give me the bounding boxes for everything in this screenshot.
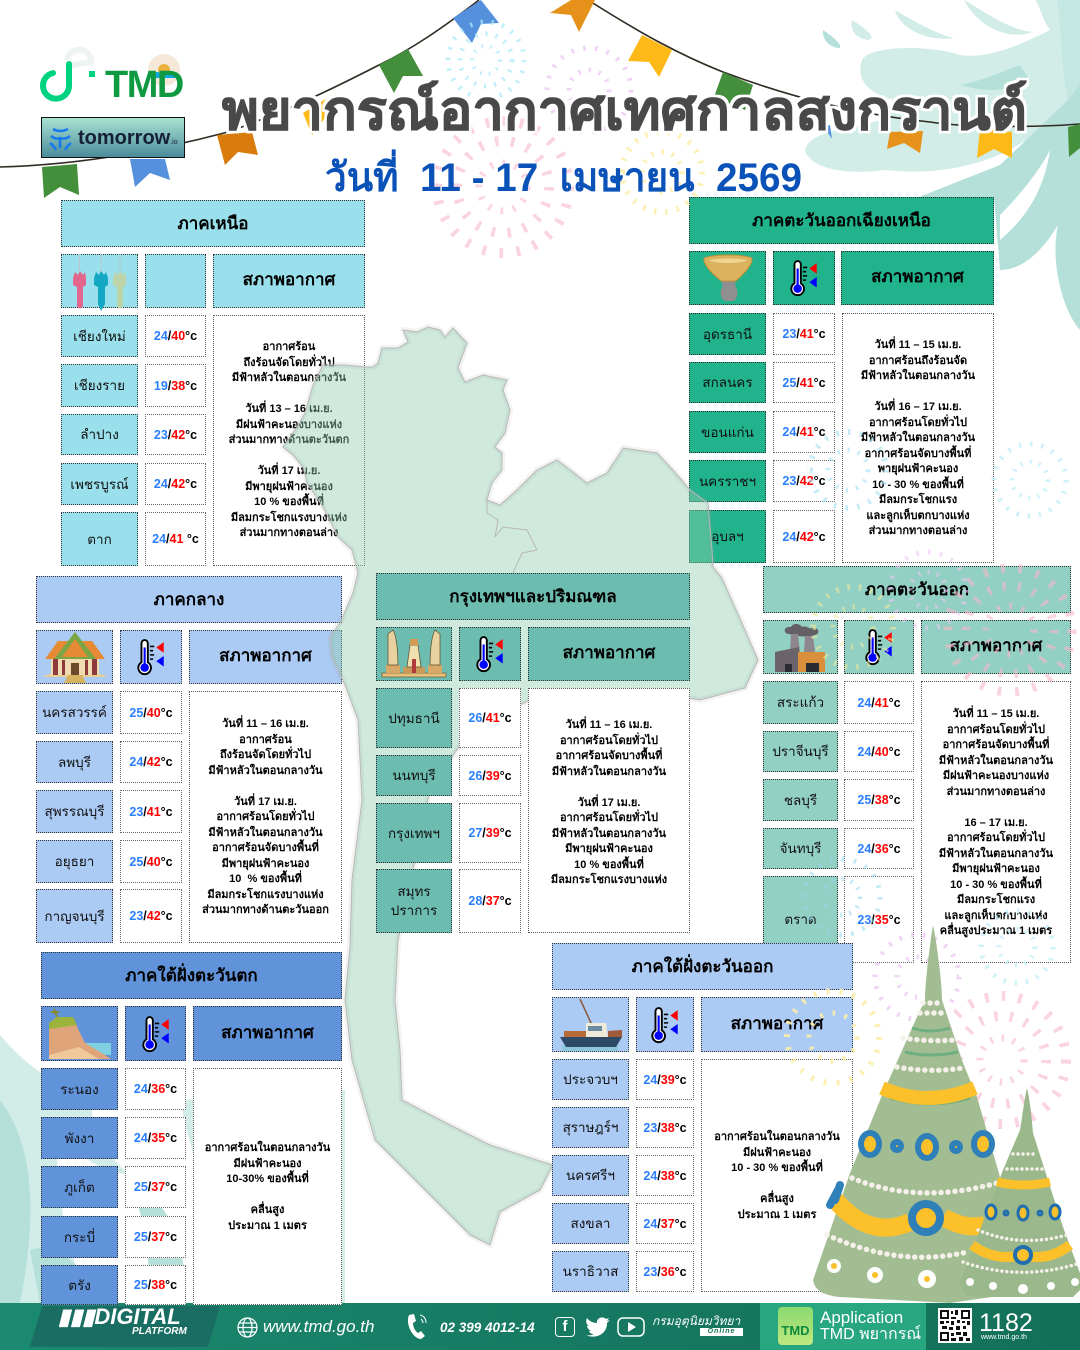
temp: Phetchabun: 24/42°c — [154, 477, 197, 491]
temp: Narathiwat: 23/36°c — [643, 1264, 687, 1278]
temp: Suphan Buri: 23/41°c — [129, 804, 173, 818]
forecast text: Bangkok: อากาศร้อนโดยทั่วไป — [560, 734, 658, 746]
city: Pathum Thani — [376, 688, 452, 748]
forecast text: east: มีฟ้าหลัวในตอนกลางวัน — [939, 848, 1053, 860]
platform word: PLATFORM — [132, 1326, 187, 1337]
forecast text: east: มีพายุฝนฟ้าคะนอง — [952, 863, 1040, 875]
temp: Phang Nga: 24/35°c — [134, 1131, 177, 1145]
heading: south west — [41, 952, 342, 999]
city: Krabi — [41, 1216, 118, 1258]
forecast text: north: ส่วนมากทางด้านตะวันตก — [229, 434, 349, 446]
city: Narathiwat — [552, 1251, 629, 1292]
forecast text: Bangkok: อากาศร้อนจัดบางพื้นที่ — [556, 750, 662, 762]
city: Lopburi — [36, 741, 113, 783]
city: Trang: ตรัง — [68, 1278, 91, 1292]
logo: digital mark — [40, 46, 95, 102]
online tag — [700, 1328, 743, 1336]
city: Tak — [61, 512, 138, 566]
city: Surat Thani — [552, 1107, 629, 1148]
temp: Khon Kaen — [773, 411, 835, 453]
city: Ranong: ระนอง — [60, 1082, 99, 1096]
city: Khon Kaen — [689, 411, 766, 453]
QR code — [938, 1308, 972, 1343]
city: Nakhon Si: นครศรีฯ — [566, 1168, 615, 1183]
temp: Chonburi — [844, 779, 914, 821]
temp: Nakhon Si: 24/38°c — [643, 1168, 687, 1182]
city: Udon Thani: อุดรธานี — [703, 326, 752, 342]
temp: Chanthaburi: 24/36°c — [857, 842, 901, 856]
city: Nonthaburi: นนทบุรี — [392, 768, 436, 783]
temp: Lampang: 23/42°c — [154, 428, 197, 442]
city: Ubon: อุบลฯ — [711, 529, 744, 544]
temp: Chanthaburi — [844, 828, 914, 869]
forecast text: Bangkok — [528, 688, 690, 933]
logo letters: TMD — [105, 64, 183, 106]
panel: east region — [763, 566, 1071, 963]
forecast text: south west: อากาศร้อนในตอนกลางวัน — [205, 1142, 330, 1154]
forecast text: northeast: วันที่ 16 – 17 เม.ย. — [874, 401, 962, 413]
heading: south west: ภาคใต้ฝั่งตะวันตก — [125, 966, 258, 985]
logo sun — [148, 54, 180, 86]
icon: thermometer — [773, 251, 835, 305]
forecast text: east: และลูกเห็บตกบางแห่ง — [944, 910, 1048, 922]
temp: Ayutthaya: 25/40°c — [129, 854, 173, 868]
city: Nakhon Si — [552, 1155, 629, 1196]
forecast text: northeast: ส่วนมากทางตอนล่าง — [869, 525, 967, 537]
forecast text: south west — [193, 1068, 342, 1305]
temp: Kanchanaburi — [120, 889, 182, 943]
city: Bangkok — [376, 803, 452, 863]
temp: Phetchabun — [145, 463, 206, 505]
icon: globe — [237, 1317, 258, 1338]
icon: facebook — [555, 1317, 575, 1337]
forecast text: north — [213, 315, 365, 566]
city: Ayutthaya: อยุธยา — [55, 854, 94, 869]
forecast text: central: อากาศร้อนโดยทั่วไป — [216, 811, 315, 823]
temp: Sakon Nakhon: 25/41°c — [782, 376, 826, 390]
city: Nakhon Sawan: นครสวรรค์ — [42, 705, 107, 720]
forecast text: east: ส่วนมากทางตอนล่าง — [947, 786, 1045, 798]
forecast text: east: อากาศร้อนจัดบางพื้นที่ — [943, 739, 1049, 751]
city: Chiang Mai: เชียงใหม่ — [73, 328, 126, 344]
temp: Tak: 24/41 °c — [152, 532, 199, 546]
heading: south east: ภาคใต้ฝั่งตะวันออก — [632, 957, 773, 976]
temp: Ubon — [773, 510, 835, 563]
forecast text: east: มีฝนฟ้าคะนองบางแห่ง — [943, 770, 1049, 782]
temp: Surat Thani — [636, 1107, 694, 1148]
temp: Pathum Thani — [459, 688, 521, 748]
city: Narathiwat: นราธิวาส — [563, 1264, 618, 1279]
heading: Bangkok — [376, 573, 690, 620]
city: Samut Prakan: ปราการ — [391, 903, 437, 918]
city: Suphan Buri — [36, 790, 113, 833]
city: Khon Kaen: ขอนแก่น — [701, 424, 754, 440]
forecast text: north: ส่วนมากทางตอนล่าง — [240, 527, 338, 539]
forecast text: south east: คลื่นสูง — [760, 1193, 794, 1205]
city: Sa Kaeo — [763, 681, 838, 724]
city: Sakon Nakhon: สกลนคร — [702, 375, 753, 390]
forecast text: south east — [701, 1059, 853, 1292]
forecast text: Bangkok: มีพายุฝนฟ้าคะนอง — [565, 843, 653, 855]
icon: thermometer — [636, 997, 694, 1052]
heading: weather: สภาพอากาศ — [221, 1022, 314, 1042]
icon: TMD app — [778, 1307, 813, 1345]
city: Ranong — [41, 1068, 118, 1110]
forecast text: north: มีลมกระโชกแรงบางแห่ง — [231, 512, 347, 524]
heading: northeast — [689, 197, 994, 244]
forecast text: east: 16 – 17 เม.ย. — [964, 816, 1028, 828]
panel: north region — [61, 200, 365, 566]
heading: weather: สภาพอากาศ — [243, 270, 335, 289]
temp: Trang: 25/38°c — [134, 1278, 177, 1292]
forecast text: northeast — [842, 313, 994, 563]
city: Phang Nga: พังงา — [65, 1130, 94, 1146]
temp: Prachinburi — [844, 731, 914, 772]
city: Chonburi: ชลบุรี — [784, 792, 817, 808]
temp: Chiang Rai — [145, 364, 206, 407]
temp: Lopburi — [120, 741, 182, 783]
icon: phone — [408, 1314, 426, 1339]
city: Ayutthaya — [36, 840, 113, 883]
icon: thermometer — [125, 1006, 186, 1061]
logo: tomorrow.io — [41, 117, 185, 158]
temp: Phang Nga — [125, 1117, 186, 1159]
temp: Samut Prakan — [459, 869, 521, 933]
forecast text: Bangkok: มีลมกระโชกแรงบางแห่ง — [551, 874, 667, 886]
temp: Bangkok — [459, 803, 521, 863]
temp: Trat — [844, 876, 914, 963]
logo: TMD — [105, 54, 183, 106]
forecast text: northeast: อากาศร้อนโดยทั่วไป — [869, 416, 967, 428]
forecast text: central — [189, 691, 342, 943]
forecast text: central: ถึงร้อนจัดโดยทั่วไป — [220, 749, 311, 761]
heading: central — [36, 576, 342, 623]
heading: weather: สภาพอากาศ — [871, 267, 964, 286]
forecast text: north: 10 % ของพื้นที่ — [254, 496, 324, 508]
forecast text: northeast: มีฟ้าหลัวในตอนกลางวัน — [861, 432, 975, 444]
city: Chanthaburi — [763, 828, 838, 869]
city: Chiang Rai — [61, 364, 138, 407]
temperature header (empty) — [145, 254, 206, 308]
forecast text: south west: ประมาณ 1 เมตร — [228, 1220, 307, 1232]
panel: south east coast — [552, 943, 853, 1292]
city: Chonburi — [763, 779, 838, 821]
temp: Ubon: 24/42°c — [782, 530, 826, 544]
subtitle: วันที่ 11 - 17 เมษายน 2569 — [325, 149, 802, 200]
heading: weather — [921, 620, 1071, 674]
forecast text: Bangkok: วันที่ 17 เม.ย. — [578, 796, 640, 808]
heading: weather — [841, 251, 994, 305]
forecast text: northeast: อากาศร้อนจัดบางพื้นที่ — [865, 448, 971, 460]
city: Phetchabun — [61, 463, 138, 505]
temp: Pathum Thani: 26/41°c — [468, 711, 512, 725]
city: Prachinburi — [763, 731, 838, 772]
city: Nakhon Ratchasima — [689, 460, 766, 502]
temp: Songkhla: 24/37°c — [643, 1216, 687, 1230]
icon: factory — [763, 620, 838, 674]
city: Ubon — [689, 510, 766, 563]
phone number: 02 399 4012-14 — [440, 1320, 535, 1335]
forecast text: east: อากาศร้อนโดยทั่วไป — [947, 724, 1045, 736]
temp: Nakhon Si — [636, 1155, 694, 1196]
city: Udon Thani — [689, 313, 766, 355]
digital platform text: ▮▮▮DIGITAL — [58, 1304, 181, 1329]
temp: Samut Prakan: 28/37°c — [468, 894, 512, 908]
city: Trat — [763, 876, 838, 963]
temp: Phuket: 25/37°c — [134, 1180, 177, 1194]
forecast text: east — [921, 681, 1071, 963]
temp: Trat: 23/35°c — [857, 912, 901, 926]
small chedi — [960, 1088, 1080, 1297]
forecast text: central: มีลมกระโชกแรงบางแห่ง — [207, 888, 324, 900]
logo wordmark: tomorrow.io — [78, 127, 178, 149]
panel: northeast region — [689, 197, 994, 563]
footer bar — [0, 1303, 1080, 1350]
city: Surat Thani: สุราษฎร์ฯ — [563, 1120, 618, 1135]
temp: Chiang Mai: 24/40°c — [154, 329, 197, 343]
icon: twitter — [586, 1317, 610, 1337]
application band — [760, 1303, 926, 1350]
temp: Ayutthaya — [120, 840, 182, 883]
forecast text: north: วันที่ 13 – 16 เม.ย. — [245, 403, 333, 415]
city: Lampang — [61, 414, 138, 455]
temp: Udon Thani — [773, 313, 835, 355]
temp: Nonthaburi: 26/39°c — [468, 768, 512, 782]
forecast text: south west: คลื่นสูง — [251, 1204, 284, 1216]
icon: sticky rice basket — [689, 251, 766, 305]
forecast text: central: มีฟ้าหลัวในตอนกลางวัน — [208, 764, 323, 776]
forecast text: east: อากาศร้อนโดยทั่วไป — [947, 832, 1045, 844]
city: Sa Kaeo: สระแก้ว — [777, 695, 824, 710]
heading: weather: สภาพอากาศ — [219, 646, 312, 665]
city: Sakon Nakhon — [689, 362, 766, 403]
city: Prachuap: ประจวบฯ — [563, 1072, 618, 1087]
forecast text: central: วันที่ 17 เม.ย. — [234, 796, 297, 808]
forecast text: south west: มีฝนฟ้าคะนอง — [234, 1158, 301, 1170]
forecast text: east: มีลมกระโชกแรง — [957, 894, 1035, 906]
heading: weather — [528, 627, 690, 681]
panel: Bangkok and vicinity — [376, 573, 690, 933]
temp: Suphan Buri — [120, 790, 182, 833]
temp: Sakon Nakhon — [773, 362, 835, 403]
temp: Nonthaburi — [459, 755, 521, 796]
temp: Krabi: 25/37°c — [134, 1230, 177, 1244]
heading: weather — [701, 997, 853, 1052]
forecast text: northeast: 10 - 30 % ของพื้นที่ — [872, 478, 964, 490]
forecast text: central: อากาศร้อนจัดบางพื้นที่ — [212, 842, 319, 854]
forecast text: north: ถึงร้อนจัดโดยทั่วไป — [243, 356, 335, 368]
city: Suphan Buri: สุพรรณบุรี — [44, 804, 104, 819]
city: Trang — [41, 1265, 118, 1305]
city: Trat: ตราด — [784, 912, 817, 927]
forecast text: northeast: มีฟ้าหลัวในตอนกลางวัน — [861, 370, 975, 382]
forecast text: northeast: อากาศร้อนถึงร้อนจัด — [869, 354, 967, 366]
forecast text: south east: มีฝนฟ้าคะนอง — [743, 1146, 811, 1158]
heading: weather: สภาพอากาศ — [950, 636, 1042, 655]
city: Phuket: ภูเก็ต — [64, 1180, 95, 1194]
forecast text: north: วันที่ 17 เม.ย. — [258, 465, 320, 477]
city: Krabi: กระบี่ — [64, 1230, 95, 1244]
forecast text: north: อากาศร้อน — [263, 341, 315, 353]
forecast text: central: 10 % ของพื้นที่ — [229, 873, 302, 885]
department name: กรมอุตุนิยมวิทยา — [652, 1314, 740, 1328]
city: Kanchanaburi — [36, 889, 113, 943]
forecast text: central: อากาศร้อน — [239, 734, 292, 746]
forecast text: northeast: และลูกเห็บตกบางแห่ง — [866, 510, 970, 522]
city: Songkhla — [552, 1203, 629, 1244]
temp: Phuket — [125, 1166, 186, 1208]
heading: weather — [189, 630, 342, 684]
temp: Nakhon Sawan: 25/40°c — [129, 706, 173, 720]
icon: democracy monument — [376, 627, 452, 681]
forecast text: central: ส่วนมากทางด้านตะวันออก — [202, 904, 329, 916]
temp: Chiang Rai: 19/38°c — [154, 378, 197, 392]
large chedi — [813, 925, 1040, 1303]
hotline number: 1182 — [979, 1309, 1033, 1337]
icon: thermometer — [844, 620, 914, 674]
temp: Nakhon Sawan — [120, 691, 182, 734]
TMD forecast label: TMD พยากรณ์ — [820, 1326, 921, 1343]
heading: weather: สภาพอากาศ — [731, 1014, 823, 1032]
heading: weather — [213, 254, 365, 308]
icon: lanterns — [61, 254, 138, 308]
temp: Tak — [145, 512, 206, 566]
forecast text: east: 10 - 30 % ของพื้นที่ — [950, 878, 1042, 890]
temp: Ranong — [125, 1068, 186, 1110]
forecast text: south east: ประมาณ 1 เมตร — [738, 1208, 816, 1220]
logo mark — [49, 128, 72, 150]
panel: central region — [36, 576, 342, 943]
forecast text: east: มีฟ้าหลัวในตอนกลางวัน — [939, 754, 1053, 766]
heading: Bangkok: กรุงเทพฯและปริมณฑล — [449, 587, 617, 606]
temp: Chiang Mai — [145, 315, 206, 357]
heading: south east — [552, 943, 853, 990]
forecast text: Bangkok: วันที่ 11 – 16 เม.ย. — [566, 719, 652, 731]
forecast text: north: มีพายุฝนฟ้าคะนอง — [245, 480, 333, 492]
city: Nonthaburi — [376, 755, 452, 796]
city: Lampang: ลำปาง — [80, 427, 119, 442]
temp: Udon Thani: 23/41°c — [782, 327, 826, 341]
digital platform badge — [30, 1306, 220, 1347]
city: Prachuap — [552, 1059, 629, 1100]
forecast text: Bangkok: มีฟ้าหลัวในตอนกลางวัน — [552, 828, 666, 840]
temp: Prachinburi: 24/40°c — [857, 744, 901, 758]
title: พยากรณ์อากาศเทศกาลสงกรานต์ — [222, 80, 1027, 141]
title — [222, 78, 1030, 200]
heading: northeast: ภาคตะวันออกเฉียงเหนือ — [752, 211, 931, 230]
temp: Khon Kaen: 24/41°c — [782, 425, 826, 439]
heading: east: ภาคตะวันออก — [865, 580, 969, 599]
heading: east — [763, 566, 1071, 613]
temp: Lopburi: 24/42°c — [129, 755, 173, 769]
city: Chiang Mai — [61, 315, 138, 357]
forecast text: northeast: พายุฝนฟ้าคะนอง — [878, 463, 958, 475]
city: Phuket — [41, 1166, 118, 1208]
temp: Surat Thani: 23/38°c — [643, 1120, 687, 1134]
forecast text: Bangkok: อากาศร้อนโดยทั่วไป — [560, 812, 658, 824]
city: Samut Prakan — [376, 869, 452, 933]
temp: Kanchanaburi: 23/42°c — [129, 909, 173, 923]
temp: Krabi — [125, 1216, 186, 1258]
forecast text: south west: 10-30% ของพื้นที่ — [226, 1173, 309, 1185]
icon: thermometer — [459, 627, 521, 681]
heading: central: ภาคกลาง — [154, 590, 224, 609]
panel: south west coast — [41, 952, 342, 1305]
forecast text: north: มีฟ้าหลัวในตอนกลางวัน — [232, 372, 346, 384]
city: Lopburi: ลพบุรี — [58, 754, 91, 770]
application label: Application — [820, 1308, 903, 1327]
temp: Prachuap: 24/39°c — [643, 1072, 687, 1086]
city: Chiang Rai: เชียงราย — [74, 378, 125, 393]
heading: weather — [193, 1006, 342, 1061]
icon: cliff beach — [41, 1006, 118, 1061]
icon: thermometer — [120, 630, 182, 684]
city: Songkhla: สงขลา — [571, 1216, 610, 1231]
forecast text: central: วันที่ 11 – 16 เม.ย. — [222, 718, 309, 730]
city: Prachinburi: ปราจีนบุรี — [772, 744, 829, 759]
icon: temple — [36, 630, 113, 684]
forecast text: south east: อากาศร้อนในตอนกลางวัน — [714, 1131, 840, 1143]
city: Phang Nga — [41, 1117, 118, 1159]
temp: Sa Kaeo: 24/41°c — [857, 696, 901, 710]
icon: play — [617, 1317, 645, 1337]
city: Phetchabun: เพชรบูรณ์ — [70, 476, 129, 492]
forecast text: north: มีฝนฟ้าคะนองบางแห่ง — [236, 418, 342, 430]
forecast text: northeast: วันที่ 11 – 15 เม.ย. — [875, 339, 961, 351]
city: Tak: ตาก — [87, 532, 112, 546]
temp: Bangkok: 27/39°c — [468, 826, 512, 840]
temp: Sa Kaeo — [844, 681, 914, 724]
forecast text: central: มีฟ้าหลัวในตอนกลางวัน — [208, 826, 323, 838]
icon: fishing boat — [552, 997, 629, 1052]
forecast text: east: วันที่ 11 – 15 เม.ย. — [953, 708, 1039, 720]
forecast text: east: คลื่นสูงประมาณ 1 เมตร — [940, 925, 1052, 937]
city: Nakhon Ratchasima: นครราชฯ — [699, 474, 756, 488]
city: Samut Prakan: สมุทร — [397, 884, 431, 899]
city: Kanchanaburi: กาญจนบุรี — [44, 908, 105, 924]
temp: Nakhon Ratchasima: 23/42°c — [782, 474, 826, 488]
heading: weather: สภาพอากาศ — [563, 643, 655, 662]
heading: north — [61, 200, 365, 247]
hotline website: www.tmd.go.th — [981, 1334, 1027, 1341]
footer content — [58, 1304, 1033, 1345]
forecast text: central: มีพายุฝนฟ้าคะนอง — [222, 858, 309, 870]
icon: TMD app: TMD — [781, 1323, 810, 1338]
forecast text: Bangkok: 10 % ของพื้นที่ — [574, 858, 644, 870]
temp: Trang — [125, 1265, 186, 1305]
city: Pathum Thani: ปทุมธานี — [388, 710, 440, 726]
forecast text: south east: 10 - 30 % ของพื้นที่ — [731, 1162, 823, 1174]
temp: Songkhla — [636, 1203, 694, 1244]
temp: Prachuap — [636, 1059, 694, 1100]
city: Nakhon Sawan — [36, 691, 113, 734]
website: www.tmd.go.th — [263, 1317, 374, 1336]
temp: Ranong: 24/36°c — [134, 1082, 177, 1096]
heading: north: ภาคเหนือ — [178, 214, 248, 233]
city: Bangkok: กรุงเทพฯ — [388, 826, 440, 840]
online tag: Online — [708, 1328, 735, 1335]
forecast text: Bangkok: มีฟ้าหลัวในตอนกลางวัน — [552, 766, 666, 778]
temp: Chonburi: 25/38°c — [857, 793, 901, 807]
temp: Lampang — [145, 414, 206, 455]
city: Chanthaburi: จันทบุรี — [780, 841, 821, 856]
icon: facebook: f — [562, 1318, 568, 1335]
temp: Nakhon Ratchasima — [773, 460, 835, 502]
forecast text: northeast: มีลมกระโชกแรง — [879, 494, 957, 506]
temp: Narathiwat — [636, 1251, 694, 1292]
